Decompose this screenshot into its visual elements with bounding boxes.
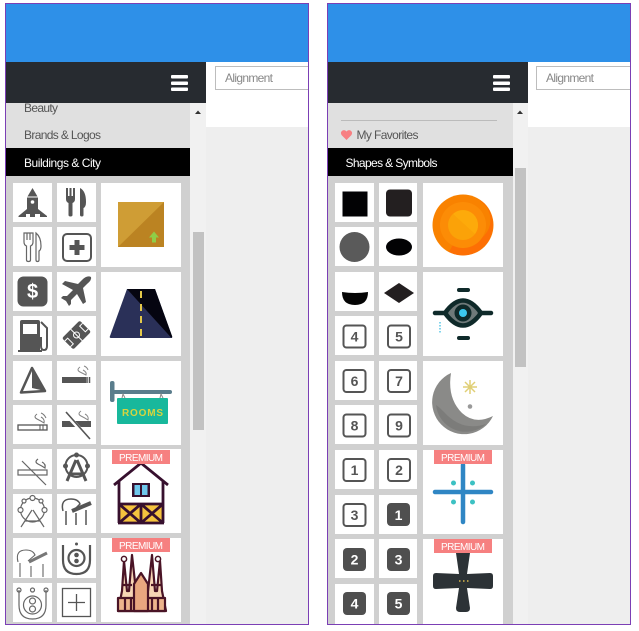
alignment input: Alignment [225,71,274,85]
icon: horseshoe outline [17,588,48,619]
premium badge: PREMIUM [119,453,163,464]
category menu: Brands & Logos [24,128,101,142]
icon: black ellipse [386,238,412,256]
white toolbar [528,62,630,127]
selected category [327,148,513,176]
category menu [327,103,513,176]
icon: ferris wheel [64,454,89,481]
scrollbar [513,103,528,624]
number badges outline 4 to 5 [344,326,410,348]
icon: black square [342,192,368,216]
house premium icon [114,463,168,523]
number badges filled: 1 [395,507,403,523]
icon: roller coaster [62,499,91,525]
icon: blue cross with dots [435,465,491,522]
icon: soccer field [62,321,91,349]
number badges outline 1 to 3 [344,459,410,526]
icon: orange circle [432,194,494,256]
icon: plus box [63,234,91,261]
category menu: My Favorites [356,128,418,142]
icon: dark cross [433,553,493,612]
icon: gold square [118,202,164,247]
number badges outline 4 to 5: 5 [395,328,403,344]
category menu [5,101,190,176]
top blue bar [327,4,630,62]
icon: hanging rooms sign: ROOMS [122,408,163,419]
premium badge: PREMIUM [441,453,485,464]
alignment input [216,66,310,90]
number badges outline 1 to 3: 2 [395,462,403,478]
icon: roller coaster outline [17,550,47,577]
icon: navigation arrow [21,368,45,392]
number badges outline 6 to 9 [344,370,410,436]
icon: fork and knife outline [24,233,41,262]
premium badge [112,538,170,552]
alignment input [536,66,634,90]
selected category: Buildings & City [24,156,101,170]
number badges filled: 2 [351,552,359,568]
icon: plus square outline [62,588,90,616]
number badges filled [343,503,410,615]
white toolbar [206,62,308,127]
premium badge: PREMIUM [119,541,163,552]
number badges outline 1 to 3: 1 [351,462,359,478]
number badges filled: 3 [395,552,403,568]
icon: ferris wheel outline [18,496,47,527]
panel: right screenshot [327,4,634,624]
dark header with hamburger icon [327,62,528,103]
premium badge [434,450,492,464]
icon: fork and knife [66,188,86,216]
premium badge [434,539,492,553]
number badges outline 6 to 9: 7 [395,373,403,389]
dark header with hamburger icon [5,62,206,103]
icon: road [110,289,172,338]
icon: cigarette [62,366,90,383]
number badges filled: 4 [351,596,359,612]
category menu: Beauty [24,101,58,115]
premium badge: PREMIUM [441,542,485,553]
premium badge [112,450,170,464]
icon grid background [5,176,190,624]
selected category [5,148,190,176]
icon: crescent moon and star [432,373,493,434]
top blue bar [5,4,308,62]
selected category: Shapes & Symbols [346,156,438,170]
icon grid background [327,176,513,624]
icon: dollar badge [18,276,48,306]
icon: church [18,188,47,217]
icon: airplane [61,276,91,306]
number badges outline 6 to 9: 9 [395,418,403,434]
alignment input: Alignment [546,71,595,85]
icon: diamond [384,283,414,303]
icon: eye [435,288,491,340]
icon: horseshoe magnet [63,542,90,574]
number badges filled: 5 [395,596,403,612]
icon: fuel pump [18,320,47,352]
icon: half circle [342,292,368,305]
icon: dollar badge: $ [27,281,38,303]
panel: left screenshot [5,4,310,624]
icon: rounded square [386,190,412,216]
number badges outline 6 to 9: 6 [351,373,359,389]
scrollbar [190,103,206,624]
icon: hanging rooms sign [110,381,172,424]
number badges outline 6 to 9: 8 [351,418,359,434]
icon: cigarette outline [18,413,47,430]
icon: gray circle [340,232,370,262]
number badges outline 4 to 5: 4 [351,328,359,344]
icon: no smoking [62,411,91,440]
number badges outline 1 to 3: 3 [351,507,359,523]
icon: no smoking outline [18,459,47,485]
cathedral premium icon [118,555,166,611]
